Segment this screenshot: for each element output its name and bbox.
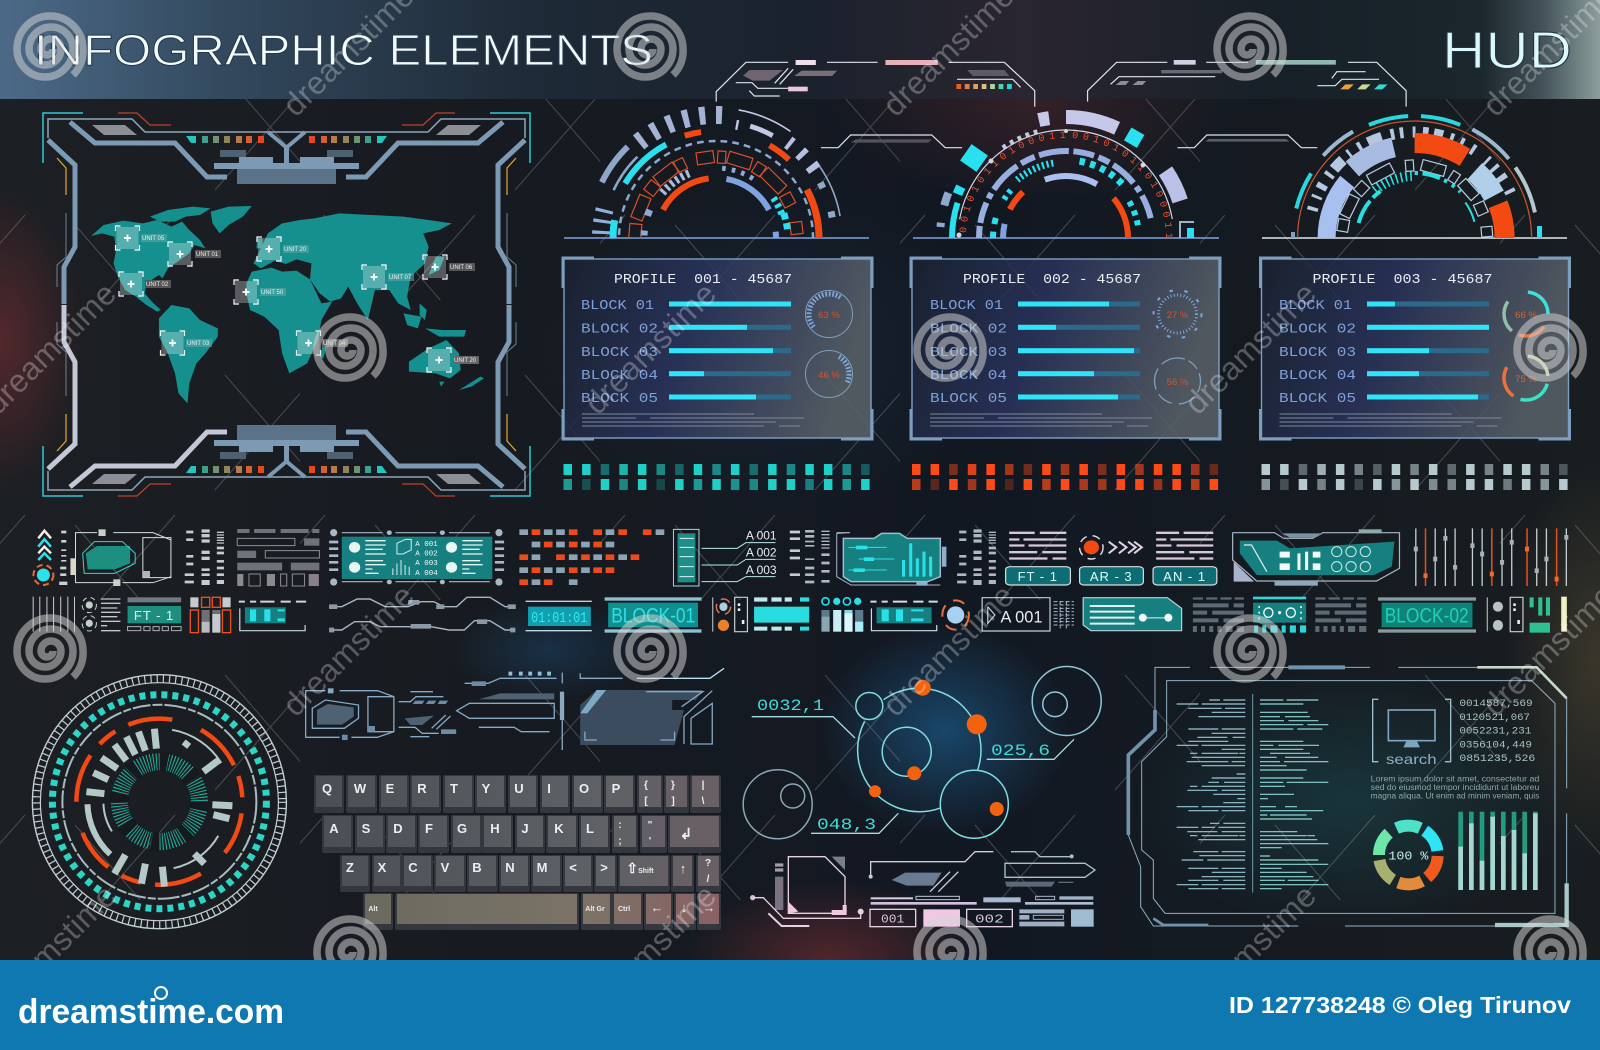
time readout <box>526 601 592 631</box>
lorem text: magna aliqua. Ut enim ad minim veniam, quis <box>1371 791 1539 800</box>
key legends: U <box>514 781 524 796</box>
key legends: Alt Gr <box>585 906 605 913</box>
title: INFOGRAPHIC ELEMENTS <box>34 26 653 75</box>
key legends: R <box>417 781 427 796</box>
profile 002 rows: BLOCK 02 <box>930 322 1007 338</box>
gauge 2 <box>913 110 1219 239</box>
number list: 0052231,231 <box>1459 725 1531 736</box>
profile 003 dial 66 <box>1495 283 1557 345</box>
A 001 box: A 001 <box>1001 607 1043 626</box>
tag FT - 1: FT - 1 <box>1018 569 1058 584</box>
key legends: : <box>618 820 622 831</box>
profile 003 rows <box>1279 298 1489 407</box>
key legends: V <box>441 860 450 875</box>
teal console: A 004 <box>415 570 438 578</box>
lorem text: sed do eiusmod tempor incididunt ut laboreu <box>1371 783 1539 792</box>
grey spokes <box>86 729 232 887</box>
key legends: Z <box>346 860 354 875</box>
key legends: C <box>408 860 418 875</box>
profile 003 rows: BLOCK 02 <box>1279 322 1356 338</box>
binary readout <box>960 131 1173 238</box>
vertical bars <box>1458 812 1538 890</box>
profile 002 dial 56 <box>1154 358 1200 404</box>
profile 001 dial 46: 46 % <box>818 370 840 381</box>
watermark text: dreamstime <box>577 877 723 1023</box>
short columns <box>957 529 996 585</box>
value labels: 0032,1 <box>757 697 824 715</box>
sliders <box>1414 528 1568 586</box>
map markers: UNIT 03 <box>187 341 210 347</box>
number list <box>1459 698 1535 764</box>
key legends: K <box>554 821 564 836</box>
profile 001 dial 63: 63 % <box>818 310 840 321</box>
green indicator group <box>1487 597 1567 633</box>
key legends: Q <box>322 781 332 796</box>
key legends: I <box>547 781 551 796</box>
key legends: ↓ <box>681 900 687 915</box>
profile 001 rows: BLOCK 01 <box>581 298 654 314</box>
profile 002 rows: BLOCK 04 <box>930 368 1007 384</box>
donut 100 percent: 100 % <box>1388 849 1429 863</box>
tag FT - 1 <box>1006 532 1070 585</box>
map markers <box>116 226 479 372</box>
key legends: E <box>386 781 395 796</box>
orange bar meters <box>190 597 231 633</box>
key legends: A <box>329 821 339 836</box>
key legends: O <box>579 781 589 796</box>
small column <box>59 531 67 585</box>
key legends: S <box>362 821 371 836</box>
beacon circle <box>33 565 53 585</box>
key legends: / <box>707 874 710 885</box>
BLOCK-02 tag: BLOCK-02 <box>1385 605 1469 628</box>
BLOCK-01 tag: BLOCK-01 <box>611 605 695 628</box>
text columns <box>1177 700 1328 889</box>
profile 002 rows: BLOCK 05 <box>930 391 1007 407</box>
key legends: L <box>586 821 594 836</box>
profile 003 dial 66: 66 % <box>1515 310 1537 321</box>
small columns <box>805 530 830 583</box>
connector panel A 001 A 002 A 003: A 003 <box>746 563 777 577</box>
teal shield frame <box>70 529 171 586</box>
panel: profile 002 <box>911 258 1220 439</box>
watermark text: dreamstime <box>1177 275 1323 421</box>
key legends: ↲ <box>680 826 692 843</box>
key legends: N <box>505 860 515 875</box>
orbital diagram <box>743 666 1101 839</box>
key legends: \ <box>702 796 705 807</box>
time readout: 01:01:01 <box>531 610 587 627</box>
key legends <box>322 780 716 915</box>
twin dials <box>82 597 120 631</box>
key legends: X <box>378 860 387 875</box>
watermark text: dreamstime <box>275 577 421 723</box>
map markers: UNIT 50 <box>261 290 284 296</box>
header band <box>0 0 1600 99</box>
big teal shape <box>1233 529 1399 586</box>
key legends: D <box>393 821 403 836</box>
profile 002 rows <box>930 298 1140 407</box>
tag AR - 3 <box>1080 567 1143 585</box>
indicator group <box>713 597 800 632</box>
donut 100 percent <box>1368 814 1449 896</box>
value labels: 048,3 <box>817 816 876 834</box>
profile 001 dial 63 <box>801 286 857 342</box>
connector panel A 001 A 002 A 003: A 001 <box>746 528 777 542</box>
panel: profile 003 <box>1260 258 1570 439</box>
number list: 0356104,449 <box>1459 739 1532 750</box>
BLOCK-02 tag <box>1378 597 1476 633</box>
key legends: → <box>702 900 716 915</box>
key legends: ⇧Shift <box>626 860 654 876</box>
gauge 1 <box>564 106 869 239</box>
key legends: ] <box>671 796 675 807</box>
profile 001 rows: BLOCK 05 <box>581 391 658 407</box>
key legends: ↑ <box>680 861 686 876</box>
profile 001 rows: BLOCK 02 <box>581 322 658 338</box>
panel: data terminal <box>1128 667 1567 926</box>
panel: world map HUD <box>43 113 530 496</box>
component strip row 2 right <box>800 597 1567 633</box>
grey blocks <box>237 529 319 586</box>
binary readout: 001010110100011 <box>1072 132 1173 238</box>
profile 003 rows: BLOCK 04 <box>1279 368 1356 384</box>
key legends: H <box>490 821 500 836</box>
grey block set 1 <box>1193 597 1244 632</box>
map markers: UNIT 07 <box>389 275 412 281</box>
footer logo: dreamstime.com <box>18 993 284 1031</box>
panel: profile 001 <box>563 258 872 439</box>
key legends: Y <box>482 781 491 796</box>
red and grey squares <box>519 529 664 585</box>
squares row: grey <box>1262 464 1568 490</box>
profile 002 rows: BLOCK 01 <box>930 298 1003 314</box>
squares row: red <box>912 464 1218 490</box>
keyboard <box>314 775 721 930</box>
watermark text: dreamstime <box>875 577 1021 723</box>
number list: 0014587,569 <box>1459 698 1533 709</box>
key legends: ? <box>705 858 711 869</box>
map markers: UNIT 20 <box>454 358 477 364</box>
search monitor <box>1373 699 1451 767</box>
teal console: A 001 <box>415 541 438 549</box>
map markers: UNIT 01 <box>196 252 219 258</box>
teal console <box>329 529 504 586</box>
profile 001 dial 46 <box>802 347 856 401</box>
terminal frame <box>1128 667 1567 926</box>
key legends: > <box>600 860 608 875</box>
value labels: 025,6 <box>991 742 1050 760</box>
tag AN - 1 <box>1153 532 1217 585</box>
teal equaliser panel <box>837 533 946 586</box>
readout end <box>800 597 809 631</box>
profile 001 title: PROFILE 001 - 45687 <box>614 272 792 288</box>
search monitor: search <box>1386 751 1437 767</box>
map markers: UNIT 05 <box>142 236 165 242</box>
heading: HUD: HUD <box>1442 22 1572 80</box>
map markers: UNIT 02 <box>146 282 169 288</box>
key legends: J <box>521 821 529 836</box>
connector panel A 001 A 002 A 003: A 002 <box>746 546 777 560</box>
key legends: | <box>702 780 705 791</box>
top connector decoration: third gauge <box>1088 60 1406 148</box>
number list: 0120521,067 <box>1459 712 1530 723</box>
key legends: Ctrl <box>618 906 630 913</box>
profile 003 rows: BLOCK 01 <box>1279 298 1352 314</box>
cyan oo panel <box>1253 597 1306 633</box>
bar columns <box>185 529 224 585</box>
map markers: UNIT 20 <box>284 247 307 253</box>
key legends: W <box>354 781 367 796</box>
profile 002 title: PROFILE 002 - 45687 <box>963 272 1141 288</box>
world map <box>91 206 484 403</box>
footer bar <box>0 960 1600 1050</box>
squiggle connectors <box>329 597 516 632</box>
profile 003 dial 75 <box>1495 347 1557 409</box>
squares row: teal <box>564 464 870 490</box>
grey block set 2 <box>1315 597 1366 632</box>
key caps <box>314 775 721 930</box>
map markers: UNIT 04 <box>323 341 346 347</box>
key legends: < <box>569 860 577 875</box>
tag AR - 3: AR - 3 <box>1090 569 1133 584</box>
tag 002: 002 <box>975 913 1004 927</box>
chevrons and beacon <box>38 531 51 560</box>
component strip right <box>805 528 1568 586</box>
green equalizer ring <box>119 762 199 842</box>
map markers: UNIT 06 <box>450 265 473 271</box>
profile 003 dial 75: 75 % <box>1515 374 1537 385</box>
orange arcs <box>42 684 277 919</box>
profile 001 rows: BLOCK 03 <box>581 345 658 361</box>
profile 002 rows: BLOCK 03 <box>930 345 1007 361</box>
gauge 3 <box>1262 114 1567 239</box>
tag 001 <box>870 909 916 927</box>
component strip row 2 left <box>33 597 800 633</box>
key legends: { <box>644 780 648 791</box>
profile 003 title: PROFILE 003 - 45687 <box>1312 272 1492 288</box>
footer credit: ID 127738248 © Oleg Tirunov <box>1229 992 1571 1018</box>
beacon and chevrons <box>1080 536 1142 559</box>
connector panel A 001 A 002 A 003 <box>673 528 777 586</box>
tag 001: 001 <box>881 913 904 927</box>
A 001 box <box>942 598 1074 631</box>
profile 002 dial 27 <box>1154 290 1202 338</box>
key legends: ; <box>618 836 622 847</box>
watermark text: dreamstime <box>577 275 723 421</box>
lorem text <box>1371 775 1539 800</box>
key legends: Alt <box>368 906 378 913</box>
profile 001 rows <box>581 298 791 407</box>
framed block <box>870 602 938 631</box>
key legends: B <box>472 860 482 875</box>
FT - 1 block <box>128 597 181 631</box>
short bars column <box>790 531 800 576</box>
component strip left <box>38 528 800 586</box>
teal console: A 003 <box>415 560 438 568</box>
key faces <box>316 776 719 886</box>
circular radar dial <box>32 675 286 929</box>
BLOCK-01 tag <box>605 597 702 633</box>
dot and column meters <box>821 598 863 632</box>
lorem text: Lorem ipsum dolor sit amet, consectetur ad <box>1371 775 1539 784</box>
key legends: F <box>425 821 433 836</box>
key legends: T <box>450 781 458 796</box>
key legends: } <box>671 780 675 791</box>
tag AN - 1: AN - 1 <box>1163 569 1206 584</box>
watermark text: dreamstime <box>1177 877 1323 1023</box>
vertical hairlines <box>33 597 74 632</box>
key legends: G <box>457 821 467 836</box>
key legends: " <box>648 820 653 831</box>
binary readout: 001010110100011 <box>960 131 1066 232</box>
tech bits above keyboard <box>306 668 724 750</box>
tag 002 <box>967 909 1012 927</box>
key legends: [ <box>644 796 648 807</box>
profile 002 dial 27: 27 % <box>1167 310 1189 321</box>
profile 001 rows: BLOCK 04 <box>581 368 658 384</box>
profile 002 dial 56: 56 % <box>1167 377 1189 388</box>
key legends: ← <box>650 900 664 915</box>
teal console: A 002 <box>415 551 438 559</box>
value labels <box>752 697 1074 834</box>
number list: 0851235,526 <box>1459 753 1535 764</box>
key legends: M <box>537 860 547 875</box>
pink tech bits <box>750 852 1095 927</box>
framed cyan block <box>239 602 306 631</box>
top connector decoration: first gauges <box>716 60 1035 148</box>
FT - 1 block: FT - 1 <box>134 608 174 623</box>
profile 003 rows: BLOCK 05 <box>1279 391 1356 407</box>
teal folder tag <box>1083 598 1182 631</box>
key legends: ' <box>649 836 651 847</box>
profile 003 rows: BLOCK 03 <box>1279 345 1356 361</box>
key legends: P <box>612 781 621 796</box>
